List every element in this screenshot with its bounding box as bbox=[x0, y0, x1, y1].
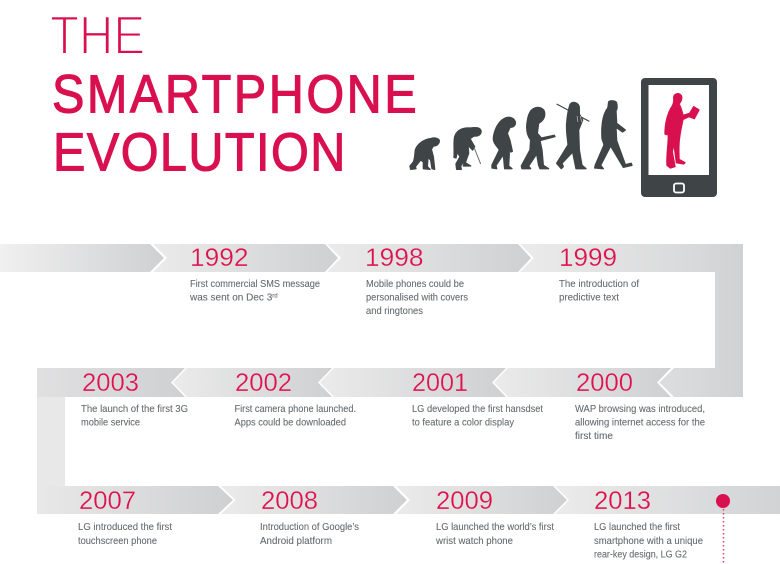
description: LG introduced the first bbox=[78, 522, 172, 533]
description: LG developed the first hansdset bbox=[412, 404, 543, 415]
description: LG launched the first bbox=[594, 522, 680, 533]
ribbon segment 2002 bbox=[173, 368, 332, 397]
description: First commercial SMS message bbox=[190, 279, 320, 290]
year: 1992 bbox=[190, 244, 248, 272]
year: 2009 bbox=[436, 487, 493, 515]
milestone 1998 bbox=[365, 244, 468, 317]
description: The introduction of bbox=[559, 279, 639, 290]
description: and ringtones bbox=[366, 306, 423, 317]
milestone 2002 bbox=[234, 369, 356, 428]
milestone 2013 bbox=[594, 487, 703, 560]
year: 1999 bbox=[559, 244, 617, 272]
description: predictive text bbox=[559, 292, 619, 304]
year: 2003 bbox=[82, 369, 139, 397]
ribbon lead-in arrow bbox=[0, 244, 164, 272]
illustration: human evolution silhouettes bbox=[410, 101, 632, 169]
ribbon segment 2003 bbox=[37, 368, 185, 397]
ribbon segment 2001 bbox=[320, 368, 506, 397]
ribbon segment 1998 bbox=[327, 244, 531, 272]
icon: hominid holding tool bbox=[521, 107, 555, 169]
milestone 1999 bbox=[559, 244, 639, 304]
description: Mobile phones could be bbox=[366, 279, 464, 290]
description: allowing internet access for the bbox=[575, 418, 705, 428]
ribbon segment 2008 bbox=[221, 486, 407, 514]
description: rd bbox=[272, 294, 278, 300]
year: 2000 bbox=[576, 369, 633, 397]
title bbox=[50, 4, 419, 182]
icon: hunched ape with cane bbox=[454, 128, 481, 169]
description: mobile service bbox=[81, 418, 140, 428]
icon: crouching ape bbox=[410, 138, 439, 169]
ribbon segment 1999 with right turn bbox=[520, 244, 743, 397]
milestone 1992 bbox=[189, 244, 320, 304]
icon: red human figure reading bbox=[665, 94, 699, 168]
description: rear-key design, LG G2 bbox=[594, 550, 687, 560]
ribbon segment 2007 bbox=[37, 486, 233, 514]
timeline end marker with dotted line bbox=[716, 494, 730, 564]
milestone 2007 bbox=[78, 487, 172, 547]
description: smartphone with a unique bbox=[594, 536, 703, 547]
ribbon segment 2009 bbox=[396, 486, 567, 514]
icon: early hominid bbox=[492, 117, 515, 169]
ribbon left turn column bbox=[37, 397, 65, 514]
title line: THE: THE bbox=[50, 4, 145, 66]
description: The launch of the first 3G bbox=[81, 404, 188, 415]
ribbon segment 1992 bbox=[153, 244, 338, 272]
description: Apps could be downloaded bbox=[234, 418, 346, 428]
description: was sent on Dec 3 bbox=[189, 292, 273, 304]
description: First camera phone launched. bbox=[234, 404, 356, 415]
timeline ribbon bbox=[0, 244, 780, 514]
icon: hominid with stick on shoulder bbox=[557, 103, 589, 169]
milestone 2008 bbox=[260, 487, 359, 547]
description: Introduction of Google’s bbox=[260, 522, 359, 533]
description: to feature a color display bbox=[412, 418, 514, 428]
year: 2007 bbox=[79, 487, 136, 515]
description: first time bbox=[575, 431, 613, 442]
ribbon segment 2013 bbox=[555, 486, 780, 514]
description: Android platform bbox=[260, 536, 332, 547]
year: 2001 bbox=[412, 369, 468, 397]
description: wrist watch phone bbox=[435, 536, 513, 547]
description: LG launched the world’s first bbox=[436, 522, 554, 533]
milestone 2001 bbox=[412, 369, 543, 428]
title line: SMARTPHONE: SMARTPHONE bbox=[52, 63, 419, 124]
description: WAP browsing was introduced, bbox=[575, 404, 705, 415]
year: 2008 bbox=[261, 487, 318, 515]
description: personalised with covers bbox=[366, 292, 468, 304]
icon: smartphone with reading figure bbox=[641, 78, 717, 197]
title line: EVOLUTION: EVOLUTION bbox=[53, 121, 347, 182]
year: 1998 bbox=[365, 244, 424, 272]
milestone 2000 bbox=[575, 369, 705, 442]
milestone 2003 bbox=[81, 369, 188, 428]
description: touchscreen phone bbox=[78, 536, 157, 547]
milestone 2009 bbox=[435, 487, 554, 547]
year: 2013 bbox=[594, 487, 651, 515]
year: 2002 bbox=[235, 369, 292, 397]
ribbon segment 2000 bbox=[494, 368, 671, 397]
icon: walking man bbox=[595, 101, 632, 169]
